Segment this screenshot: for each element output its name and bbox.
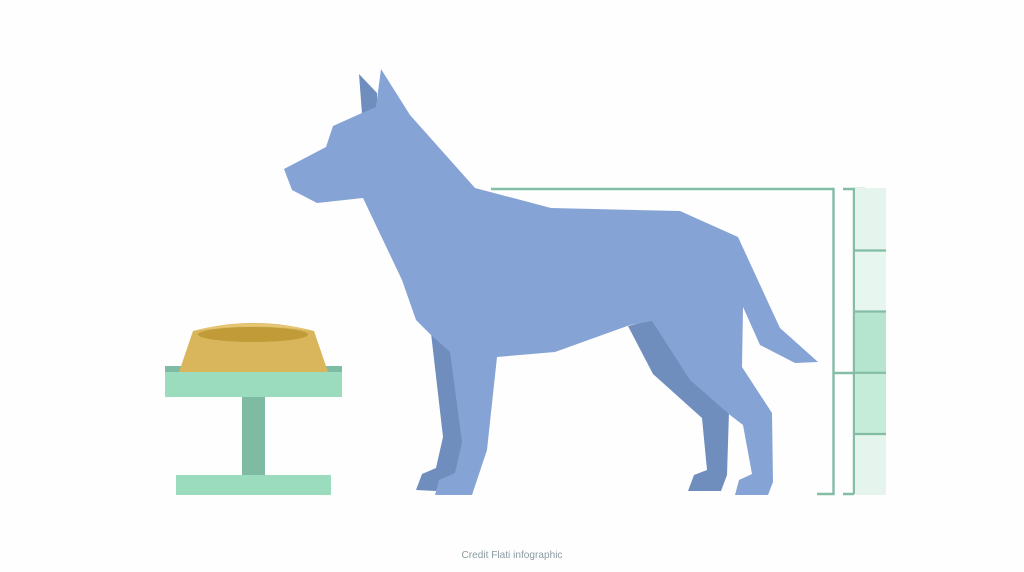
scale segment 5 (855, 434, 886, 495)
dog silhouette (284, 69, 818, 495)
height bracket from shoulder (491, 189, 834, 494)
feeder base (176, 475, 331, 495)
scale segment 2 (855, 250, 886, 311)
scale dividers (854, 250, 886, 434)
feeder table top shadow strip (165, 366, 342, 373)
food bowl rim highlight (193, 324, 314, 331)
scale segment 1 (855, 188, 886, 250)
height scale column (854, 188, 886, 495)
feeder table top (165, 372, 342, 397)
scale segment 4 highlighted (855, 373, 886, 434)
far ear (359, 74, 377, 114)
dog body (284, 69, 818, 495)
connector between brackets (834, 372, 854, 374)
food bowl body (179, 323, 328, 372)
icon: raised feeder with bowl (165, 323, 342, 495)
scale bracket (843, 189, 865, 494)
food bowl opening (198, 327, 308, 342)
far hind leg (628, 320, 729, 491)
measurement guide lines (491, 189, 865, 494)
credit caption: Credit Flati infographic (462, 550, 562, 561)
far front leg (416, 333, 463, 491)
feeder post (242, 397, 265, 475)
scale segment 3 highlighted (855, 311, 886, 373)
